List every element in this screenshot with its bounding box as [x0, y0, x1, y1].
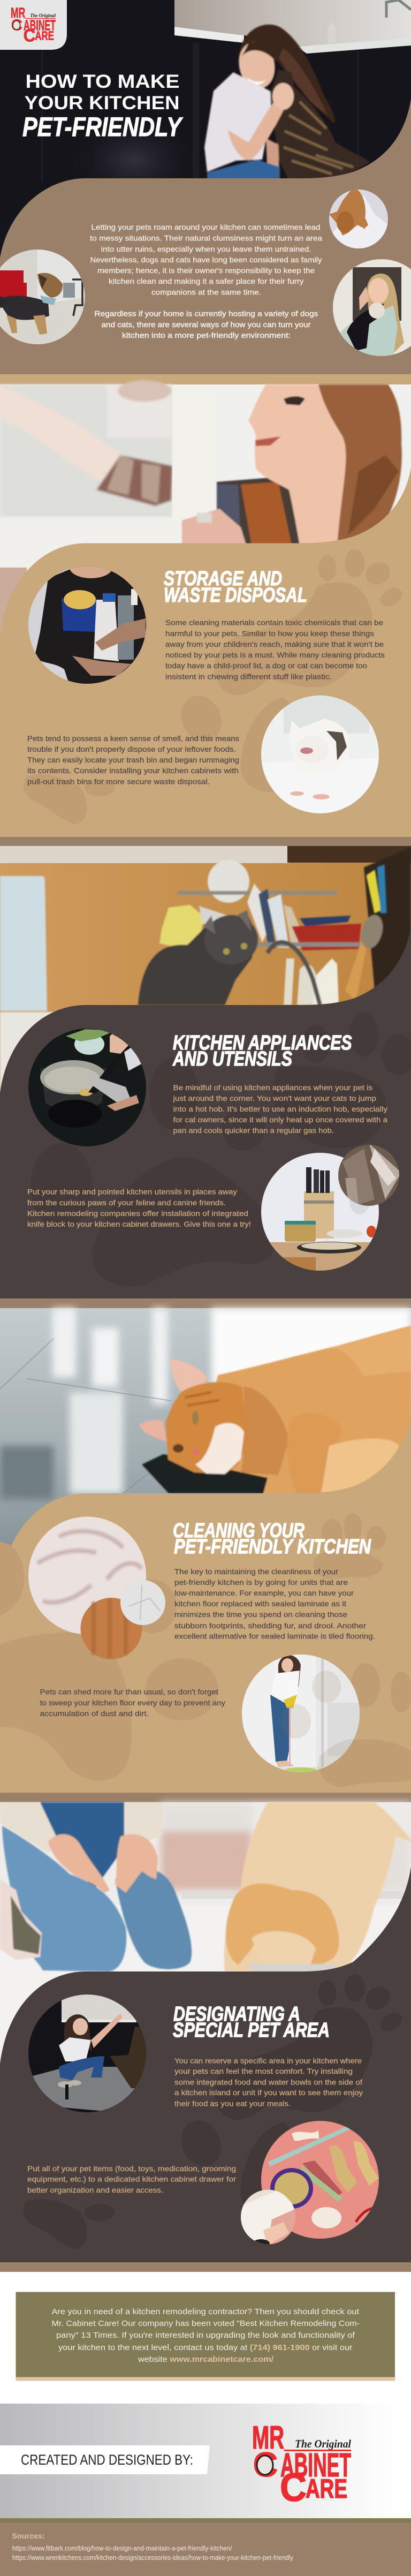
text: cleaning paragraph two: accumulation of dust and dirt.	[40, 1709, 149, 1718]
text: storage paragraph one	[165, 618, 385, 681]
photo circle: pet treats and collar on pink	[260, 2119, 383, 2240]
intro text: kitchen into a more pet-friendly environment:	[122, 331, 291, 339]
panel: storage and waste disposal	[0, 467, 411, 847]
text: storage paragraph two: They can easily locate your trash bin and began rummaging	[27, 756, 239, 764]
brown divider band	[0, 837, 411, 847]
callout text	[51, 2307, 360, 2364]
photo circle: white calico cat on tile	[260, 693, 380, 817]
tan divider band	[0, 374, 411, 384]
title: YOUR KITCHEN	[25, 93, 180, 114]
logo: Mr. Cabinet Care small: The Original	[30, 13, 56, 19]
intro text: into utter ruins, especially when you leave them untrained.	[101, 245, 311, 253]
logo: Mr. Cabinet Care large: C	[280, 2465, 307, 2510]
text: cleaning paragraph one: stubborn footprints, shedding fur, and drool. Another	[174, 1621, 366, 1630]
text: appliances paragraph two: Kitchen remodeling companies offer installation of integrated	[27, 1209, 248, 1218]
heading: cleaning your pet-friendly kitchen	[173, 1520, 371, 1558]
photo circle: woman on phone holding cat	[332, 259, 411, 357]
title	[22, 71, 184, 142]
intro text: Letting your pets roam around your kitchen can sometimes lead	[91, 223, 320, 231]
logo: Mr. Cabinet Care large: C	[253, 2445, 278, 2484]
intro text: Regardless if your home is currently hosting a variety of dogs	[94, 309, 318, 318]
text: storage paragraph two	[27, 734, 239, 786]
text: cleaning paragraph two	[40, 1688, 225, 1718]
intro text: Nevertheless, dogs and cats have long been considered as family	[90, 255, 322, 264]
logo: Mr. Cabinet Care large	[252, 2420, 351, 2510]
heading: storage and waste disposal: WASTE DISPOSAL	[164, 584, 307, 607]
photo circle: woman training dog in kitchen	[27, 1993, 148, 2115]
logo: Mr. Cabinet Care small: MR	[11, 4, 25, 21]
photo circle: white fur rug	[28, 1516, 146, 1634]
text: appliances paragraph two: Put your sharp and pointed kitchen utensils in places away	[27, 1188, 237, 1196]
paw watermark right	[214, 549, 406, 695]
heading: designating a special pet area: DESIGNATING A	[173, 2003, 300, 2026]
intro text: to messy situations. Their natural clumsiness might turn an area	[90, 233, 322, 242]
text: storage paragraph one: harmful to your pets. Similar to how you keep these things	[165, 629, 374, 638]
title: PET-FRIENDLY	[22, 112, 184, 142]
text: pet area paragraph one: a kitchen island or unit if you want to see them enjoy	[174, 2088, 363, 2097]
text: storage paragraph two: pull-out trash bins for more secure waste disposal.	[27, 777, 210, 786]
text: cleaning paragraph one: The key to maintaining the cleanliness of your	[174, 1567, 338, 1576]
panel: kitchen appliances and utensils	[0, 926, 411, 1308]
photo circle: open kitchen drawer	[241, 2190, 295, 2245]
panel: sources footer: https://www.fitbark.com/blog/how-to-design-and-maintain-a-pet-friendly-kitchen/	[12, 2544, 232, 2552]
text: appliances paragraph one: into a hot hob. It's better to use an induction hob, especially	[173, 1105, 387, 1113]
banner: created and designed by: CREATED AND DESIGNED BY:	[21, 2452, 193, 2468]
text: cleaning paragraph one	[174, 1567, 375, 1641]
photo circle: woman mopping floor	[242, 1655, 360, 1772]
text: pet area paragraph two	[27, 2164, 236, 2194]
text: storage paragraph two: its contents. Consider installing your kitchen cabinets with	[27, 766, 239, 775]
text: pet area paragraph two: Put all of your pet items (food, toys, medication, grooming	[27, 2164, 236, 2173]
panel: sources footer: Sources:	[12, 2532, 45, 2540]
heading: kitchen appliances and utensils: AND UTENSILS	[172, 1048, 292, 1070]
heading: kitchen appliances and utensils: KITCHEN APPLIANCES	[173, 1032, 352, 1054]
text: storage paragraph two: trouble if you don't properly dispose of your leftover foods.	[27, 745, 236, 753]
text: storage paragraph one: noticed by your pets is a must. While many cleaning products	[165, 651, 385, 659]
text: cleaning paragraph two: Pets can shed more fur than usual, so don't forget	[40, 1688, 218, 1696]
callout text: your kitchen to the next level, contact us today at (714) 961-1900 or visit our	[58, 2343, 353, 2352]
heading: storage and waste disposal: STORAGE AND	[164, 568, 282, 590]
text: pet area paragraph one: your pets can feel the most comfort. Try installing	[174, 2067, 353, 2075]
heading: cleaning your pet-friendly kitchen: CLEANING YOUR	[173, 1520, 305, 1542]
logo: Mr. Cabinet Care large: The Original	[295, 2437, 351, 2450]
photo circle: woman holding cleaning products	[28, 566, 146, 684]
text: appliances paragraph one: for cat owners, since it will only heat up once covered with a	[173, 1115, 387, 1124]
photo circle: yorkie in living room	[0, 250, 86, 346]
logo: Mr. Cabinet Care small	[11, 4, 56, 46]
text: appliances paragraph one	[172, 1083, 387, 1135]
panel: created and designed by	[0, 2404, 411, 2518]
text: pet area paragraph one: some integrated food and water bowls on the side of	[174, 2078, 362, 2086]
panel: sources footer	[0, 2518, 411, 2576]
intro text	[90, 223, 322, 339]
paw watermark	[0, 1513, 411, 1787]
text: pet area paragraph one	[174, 2056, 363, 2107]
text: cleaning paragraph two: to sweep your kitchen floor every day to prevent any	[40, 1698, 225, 1707]
logo: Mr. Cabinet Care small: C	[24, 26, 35, 46]
text: pet area paragraph one: their food as you eat your meals.	[174, 2099, 291, 2107]
photo circle: wood floor sample	[80, 1598, 142, 1659]
panel: designating a special pet area	[0, 1867, 411, 2272]
text: appliances paragraph two: from the curious paws of your feline and canine friends.	[27, 1198, 226, 1207]
text: appliances paragraph one: just around the corner. You won't want your cats to jump	[172, 1094, 376, 1102]
text: appliances paragraph two: knife block to your kitchen cabinet drawers. Give this one a try!	[27, 1220, 251, 1228]
logo: Mr. Cabinet Care small: ABINET	[24, 17, 56, 34]
heading: kitchen appliances and utensils	[172, 1032, 352, 1070]
heading: storage and waste disposal	[164, 568, 307, 607]
text: appliances paragraph one: pan and cools quicker than a regular gas hob.	[173, 1126, 334, 1135]
callout text: pany" 13 Times. If you're interested in upgrading the look and functionality of	[56, 2331, 355, 2340]
brown divider band	[0, 2262, 411, 2272]
text: pet area paragraph two: equipment, etc.) to a dedicated kitchen cabinet drawer for	[27, 2175, 236, 2184]
panel: sources footer: https://www.wrenkitchens.com/kitchen-design/accessories-ideas/how-to-make-your-kitchen-pet-friendly	[12, 2554, 293, 2562]
brown divider band	[0, 1298, 411, 1308]
intro text: members; hence, it is their owner's responsibility to keep the	[97, 266, 315, 275]
brown divider band	[0, 1793, 411, 1802]
logo: Mr. Cabinet Care large: MR	[252, 2420, 284, 2456]
photo circle: pot on induction hob	[27, 1025, 148, 1148]
text: appliances paragraph two	[27, 1188, 251, 1228]
logo badge	[0, 0, 67, 50]
photo: kneeling owner and puppy eating from bowl	[0, 1802, 411, 2070]
title: HOW TO MAKE	[26, 71, 180, 92]
text: appliances paragraph one: Be mindful of using kitchen appliances when your pet is	[173, 1083, 372, 1092]
heading: designating a special pet area	[173, 2003, 330, 2042]
text: cleaning paragraph one: low-maintenance. For example, you can have your	[174, 1589, 354, 1597]
banner: created and designed by	[0, 2445, 210, 2474]
text: pet area paragraph one: You can reserve a specific area in your kitchen where	[174, 2056, 362, 2065]
text: storage paragraph one: today have a child-proof lid, a dog or cat can become too	[165, 661, 367, 670]
text: storage paragraph two: Pets tend to possess a keen sense of smell, and this means	[27, 734, 239, 743]
panel: white call-to-action background	[0, 2272, 411, 2404]
text: storage paragraph one: away from your children's reach, making sure that it won't be	[165, 640, 384, 648]
photo circle: knife block on counter	[260, 1151, 380, 1274]
photo: ginger cat lying on marble floor	[0, 1308, 411, 1597]
callout text: website www.mrcabinetcare.com/	[138, 2355, 274, 2364]
panel: cleaning your pet-friendly kitchen	[0, 1414, 411, 1802]
callout: contact box	[16, 2292, 395, 2381]
photo: grey cat on kitchen counter	[0, 846, 411, 1104]
paw watermark lower	[23, 2114, 300, 2249]
photo circle: puppy on toilet paper	[329, 190, 388, 248]
text: storage paragraph one: insistent in chewing different stuff like plastic.	[165, 673, 332, 681]
text: cleaning paragraph one: pet-friendly kitchen is by going for units that are	[174, 1578, 348, 1587]
paw watermark lower	[23, 689, 300, 825]
logo: Mr. Cabinet Care large: ABINET	[280, 2447, 351, 2484]
callout text: Mr. Cabinet Care! Our company has been voted "Best Kitchen Remodeling Com-	[51, 2319, 360, 2328]
photo circle: marble tile sample	[120, 1580, 165, 1625]
photo circle: cutlery drawer	[337, 1144, 401, 1208]
text: cleaning paragraph one: excellent alternative for sealed laminate is tiled flooring.	[174, 1632, 375, 1641]
intro text: kitchen clean and making it a safer place for their furry	[109, 277, 304, 285]
text: pet area paragraph two: better organization and easier access.	[27, 2186, 163, 2194]
heading: cleaning your pet-friendly kitchen: PET-FRIENDLY KITCHEN	[174, 1536, 371, 1558]
paw watermark	[31, 1012, 411, 1286]
callout text: Are you in need of a kitchen remodeling contractor? Then you should check out	[51, 2307, 360, 2316]
photo: woman opening cabinet door	[0, 380, 411, 641]
logo: Mr. Cabinet Care small: ARE	[35, 29, 54, 43]
logo: Mr. Cabinet Care small: C	[11, 17, 22, 34]
hero photo: woman hugging dog in a dark kitchen	[0, 0, 411, 268]
text: storage paragraph one: Some cleaning materials contain toxic chemicals that can be	[165, 618, 383, 626]
text: cleaning paragraph one: minimizes the time you spend on cleaning those	[174, 1610, 347, 1619]
heading: designating a special pet area: SPECIAL PET AREA	[173, 2019, 330, 2042]
intro text: and cats, there are several ways of how you can turn your	[102, 320, 311, 329]
paw watermark right	[214, 1974, 406, 2120]
text: cleaning paragraph one: kitchen floor replaced with sealed laminate as it	[174, 1599, 346, 1608]
logo: Mr. Cabinet Care large: ARE	[306, 2474, 347, 2504]
intro text: companions at the same time.	[151, 288, 261, 297]
panel: intro brown wave	[0, 99, 411, 384]
